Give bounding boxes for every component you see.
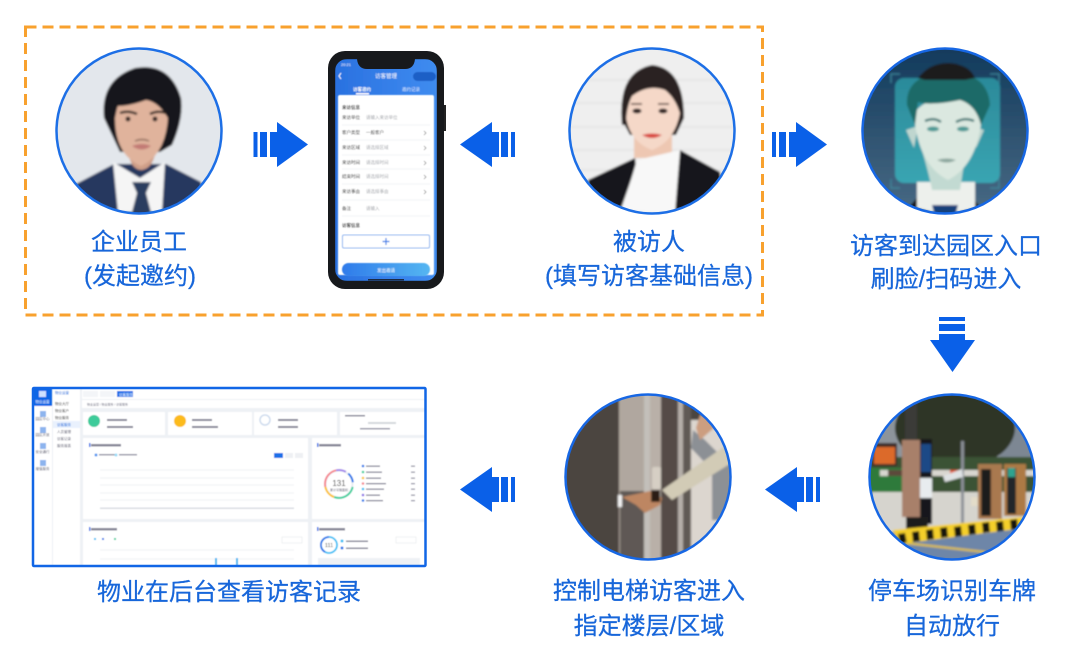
label: visitor arrives: 刷脸/扫码进入 [871, 266, 1021, 293]
label: visitor arrives [850, 233, 1042, 293]
label: visitor arrives: 访客到达园区入口 [850, 233, 1042, 260]
dashboard menu: 访客服务 [57, 422, 71, 427]
phone form: 请选择区域 [366, 144, 389, 151]
label: company employee [84, 229, 196, 290]
label: visited person: 被访人 [613, 229, 685, 256]
phone form: 来访单位 [342, 114, 360, 121]
phone form: 访客信息 [342, 222, 360, 229]
dashboard occupancy panel: 111 [325, 543, 333, 549]
dashboard menu [53, 388, 80, 568]
dashboard menu: 服务报表 [57, 443, 71, 448]
phone form: 请输入 [366, 205, 380, 212]
phone form: 来访信息 [342, 104, 360, 111]
dashboard sidebar: 增值服务 [36, 466, 50, 471]
dashboard menu: 物业运营 [55, 390, 69, 395]
dashboard menu: 物业大厅 [55, 401, 69, 406]
dashboard menu: 物业客户 [55, 408, 69, 413]
phone form [338, 95, 434, 275]
dashboard line chart panel [83, 438, 308, 519]
arrow: down to parking [930, 317, 975, 372]
arrow: parking to elevator [765, 467, 820, 512]
label: company employee: 企业员工 [91, 229, 187, 256]
phone form: 请选择时间 [366, 173, 389, 180]
dashboard donut panel: 累计可租面积 [330, 487, 348, 492]
dashboard tabs: 物业运营 / 物业服务 / 访客服务 [87, 402, 128, 406]
dashboard sidebar: 安全通行 [36, 449, 50, 454]
arrow: visitor to phone [460, 122, 515, 167]
phone form: 来访区域 [342, 144, 360, 151]
photo: company employee [55, 47, 225, 217]
phone header: 邀约记录 [402, 86, 420, 93]
label: elevator control [553, 578, 745, 640]
phone form: 客户类型 [342, 129, 360, 136]
phone header: 访客管理 [375, 72, 397, 80]
phone form: 结束时间 [342, 173, 360, 180]
phone form: 请输入来访单位 [366, 114, 398, 121]
dashboard screenshot [32, 387, 426, 568]
dashboard donut panel [312, 438, 426, 519]
phone form: 请选择事由 [366, 188, 388, 195]
dashboard menu: 访客记录 [57, 436, 71, 441]
phone form: 一般客户 [366, 129, 384, 136]
label: company employee: (发起邀约) [84, 263, 196, 290]
dashboard stat cards [83, 412, 426, 435]
phone form: 请选择时间 [366, 159, 389, 166]
dashed box: invitation stage [26, 27, 762, 315]
photo: parking gate [868, 393, 1036, 561]
phone form: 备注 [342, 205, 351, 212]
submit button: 发出邀请 [377, 267, 395, 274]
phone form: 来访时间 [342, 159, 360, 166]
dashboard sidebar: 园区开放 [36, 432, 50, 437]
label: visited person [545, 229, 753, 290]
label: dashboard records: 物业在后台查看访客记录 [97, 579, 361, 606]
arrow: to park entrance [772, 122, 827, 167]
add visitor button [342, 235, 430, 248]
phone: visitor form [328, 51, 446, 289]
dashboard sidebar [33, 388, 52, 568]
dashboard bar chart panel [83, 522, 308, 568]
phone header: 访客邀约 [353, 86, 371, 93]
arrow: employee to phone [254, 122, 308, 167]
dashboard sidebar: 物业运营 [36, 399, 50, 404]
photo: elevator access [565, 393, 736, 566]
phone form: 来访事由 [342, 188, 360, 195]
phone header [335, 59, 437, 281]
photo: visited person [568, 47, 738, 217]
phone header: 20:21 [341, 62, 352, 67]
label: visited person: (填写访客基础信息) [545, 263, 753, 290]
label: parking plate recognition [868, 578, 1036, 640]
photo: face recognition [860, 47, 1030, 217]
dashboard menu: 物业服务 [55, 415, 69, 420]
dashboard tabs [82, 389, 426, 408]
arrow: elevator to dashboard [460, 467, 515, 512]
dashboard donut panel: 131 [332, 479, 346, 488]
label: elevator control: 指定楼层/区域 [574, 613, 724, 640]
label: parking plate recognition: 停车场识别车牌 [868, 578, 1036, 605]
dashboard menu: 人员管理 [57, 429, 71, 434]
dashboard tabs: 访客服务 [119, 392, 133, 397]
submit button [342, 263, 430, 276]
dashboard sidebar: 园区中心 [36, 416, 50, 421]
label: elevator control: 控制电梯访客进入 [553, 578, 745, 605]
dashboard occupancy panel [312, 522, 426, 568]
label: parking plate recognition: 自动放行 [904, 613, 1000, 640]
